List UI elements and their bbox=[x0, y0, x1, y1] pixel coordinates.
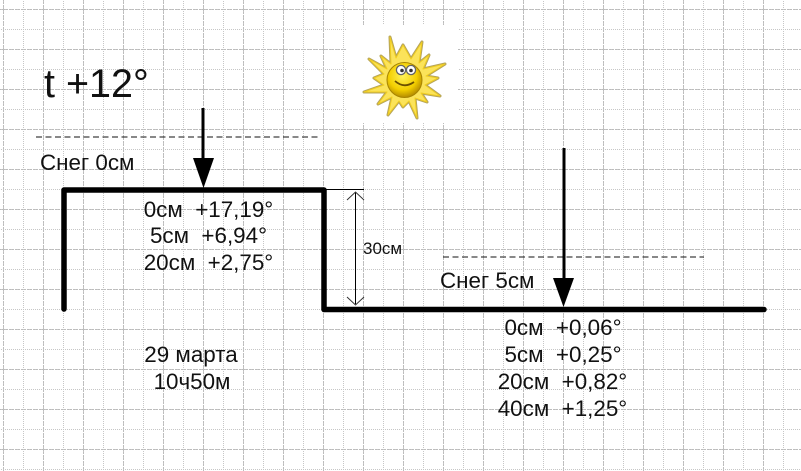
readings: left depth temperatures: 5см +6,94° bbox=[150, 223, 267, 248]
dimension: 30 cm: 30см bbox=[363, 239, 402, 258]
dashed snow level right bbox=[443, 256, 704, 258]
label: snow left: Снег 0см bbox=[40, 150, 134, 175]
date and time: 10ч50м bbox=[154, 369, 230, 394]
readings: right depth temperatures: 0см +0,06° bbox=[504, 315, 622, 340]
arrow: left sunlight bbox=[193, 108, 214, 188]
dimension: 30 cm bbox=[326, 190, 402, 305]
title: temperature: t +12° bbox=[44, 62, 149, 106]
date and time bbox=[144, 342, 238, 394]
icon: sun bbox=[347, 25, 458, 123]
dashed snow level left bbox=[36, 136, 321, 138]
label: snow right: Снег 5см bbox=[440, 268, 534, 293]
readings: left depth temperatures: 20см +2,75° bbox=[144, 250, 273, 275]
date and time: 29 марта bbox=[144, 342, 238, 367]
readings: left depth temperatures: 0см +17,19° bbox=[144, 197, 273, 222]
readings: right depth temperatures: 5см +0,25° bbox=[504, 342, 622, 367]
arrow: right sunlight bbox=[553, 148, 574, 307]
readings: left depth temperatures bbox=[144, 197, 273, 275]
readings: right depth temperatures bbox=[498, 315, 627, 421]
readings: right depth temperatures: 40см +1,25° bbox=[498, 396, 627, 421]
readings: right depth temperatures: 20см +0,82° bbox=[498, 369, 627, 394]
profile line: raised bed and ground bbox=[64, 190, 764, 310]
